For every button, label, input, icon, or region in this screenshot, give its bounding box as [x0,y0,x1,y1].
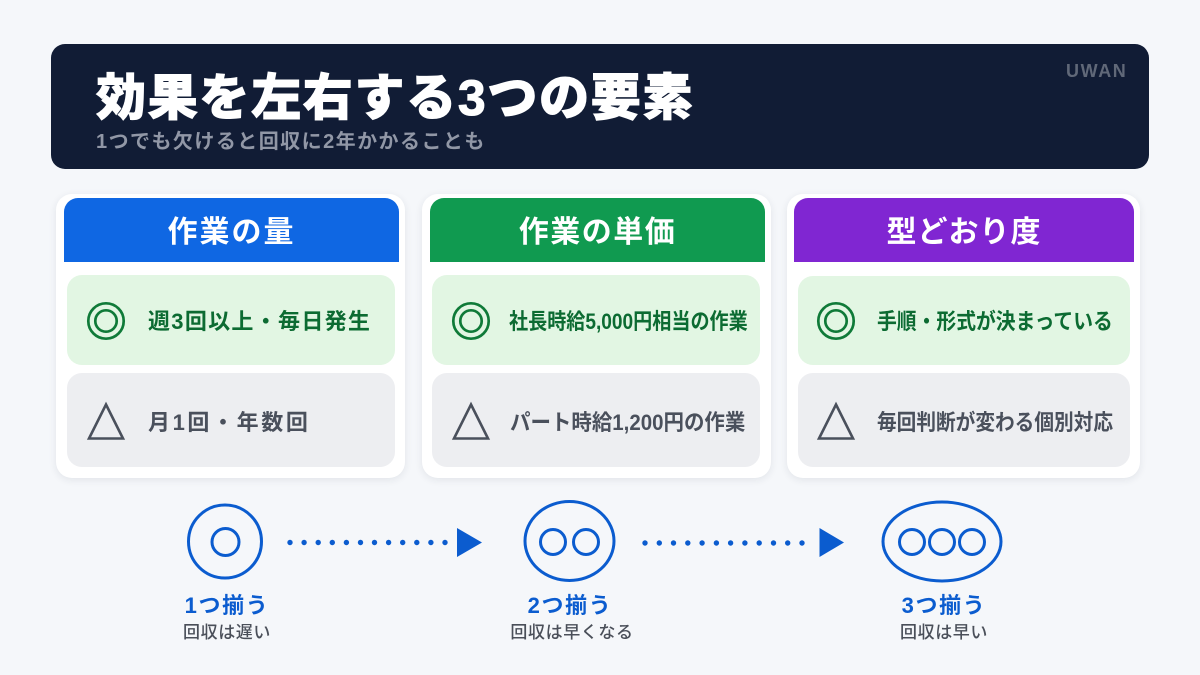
good row: conformity [798,276,1130,365]
icon: double circle [452,302,490,340]
caution row: conformity [798,373,1130,467]
panel: 作業の単価 [422,194,772,480]
good row: unit price [432,275,760,365]
caution text: unit price: パート時給1,200円の作業 [510,410,745,435]
panel heading: 作業の単価 [430,198,765,262]
panel heading: 作業の量 [64,198,399,262]
caption: 回収は早い: 回収は早い [900,623,988,642]
good text: conformity: 手順・形式が決まっている [877,309,1113,334]
icon: one circle [188,505,262,578]
caution text: conformity: 毎回判断が変わる個別対応 [877,410,1113,435]
icon: triangle [452,402,490,440]
caption: 回収は早くなる: 回収は早くなる [510,623,634,642]
good text: unit price: 社長時給5,000円相当の作業 [509,309,748,334]
card background [787,194,1140,478]
caution text: volume: 月1回・年数回 [148,410,310,435]
panel heading: 型どおり度 [794,198,1134,262]
label: 2つ揃う: 2つ揃う [528,593,612,618]
arrow: two to three [642,528,844,557]
arrow: one to two [287,528,482,557]
panel: 作業の量 [56,194,406,480]
icon: double circle [816,302,856,340]
header banner [51,44,1149,169]
caution row: unit price [432,373,760,467]
icon: triangle [87,402,125,440]
brand mark: UWAN [1066,61,1127,81]
progression graphic [187,500,1002,582]
panel heading: 作業の単価: 作業の単価 [519,216,676,249]
panel: 型どおり度 [786,194,1140,480]
good row: volume [67,275,395,365]
icon: three circles [883,502,1001,581]
label: 3つ揃う: 3つ揃う [902,593,986,618]
caption: 回収は遅い: 回収は遅い [183,623,271,642]
caution row: volume [67,373,395,467]
icon: two circles [525,502,614,580]
panel heading: 型どおり度: 型どおり度 [886,216,1042,249]
card background [422,194,771,478]
card background [56,194,405,478]
icon: double circle [86,302,126,340]
icon: triangle [817,402,855,440]
panel heading: 作業の量: 作業の量 [168,216,296,249]
label: 1つ揃う: 1つ揃う [185,593,269,618]
good text: volume: 週3回以上・毎日発生 [148,309,371,334]
subtitle: 1つでも欠けると回収に2年かかることも [96,131,486,153]
title: 効果を左右する3つの要素 [96,70,694,126]
